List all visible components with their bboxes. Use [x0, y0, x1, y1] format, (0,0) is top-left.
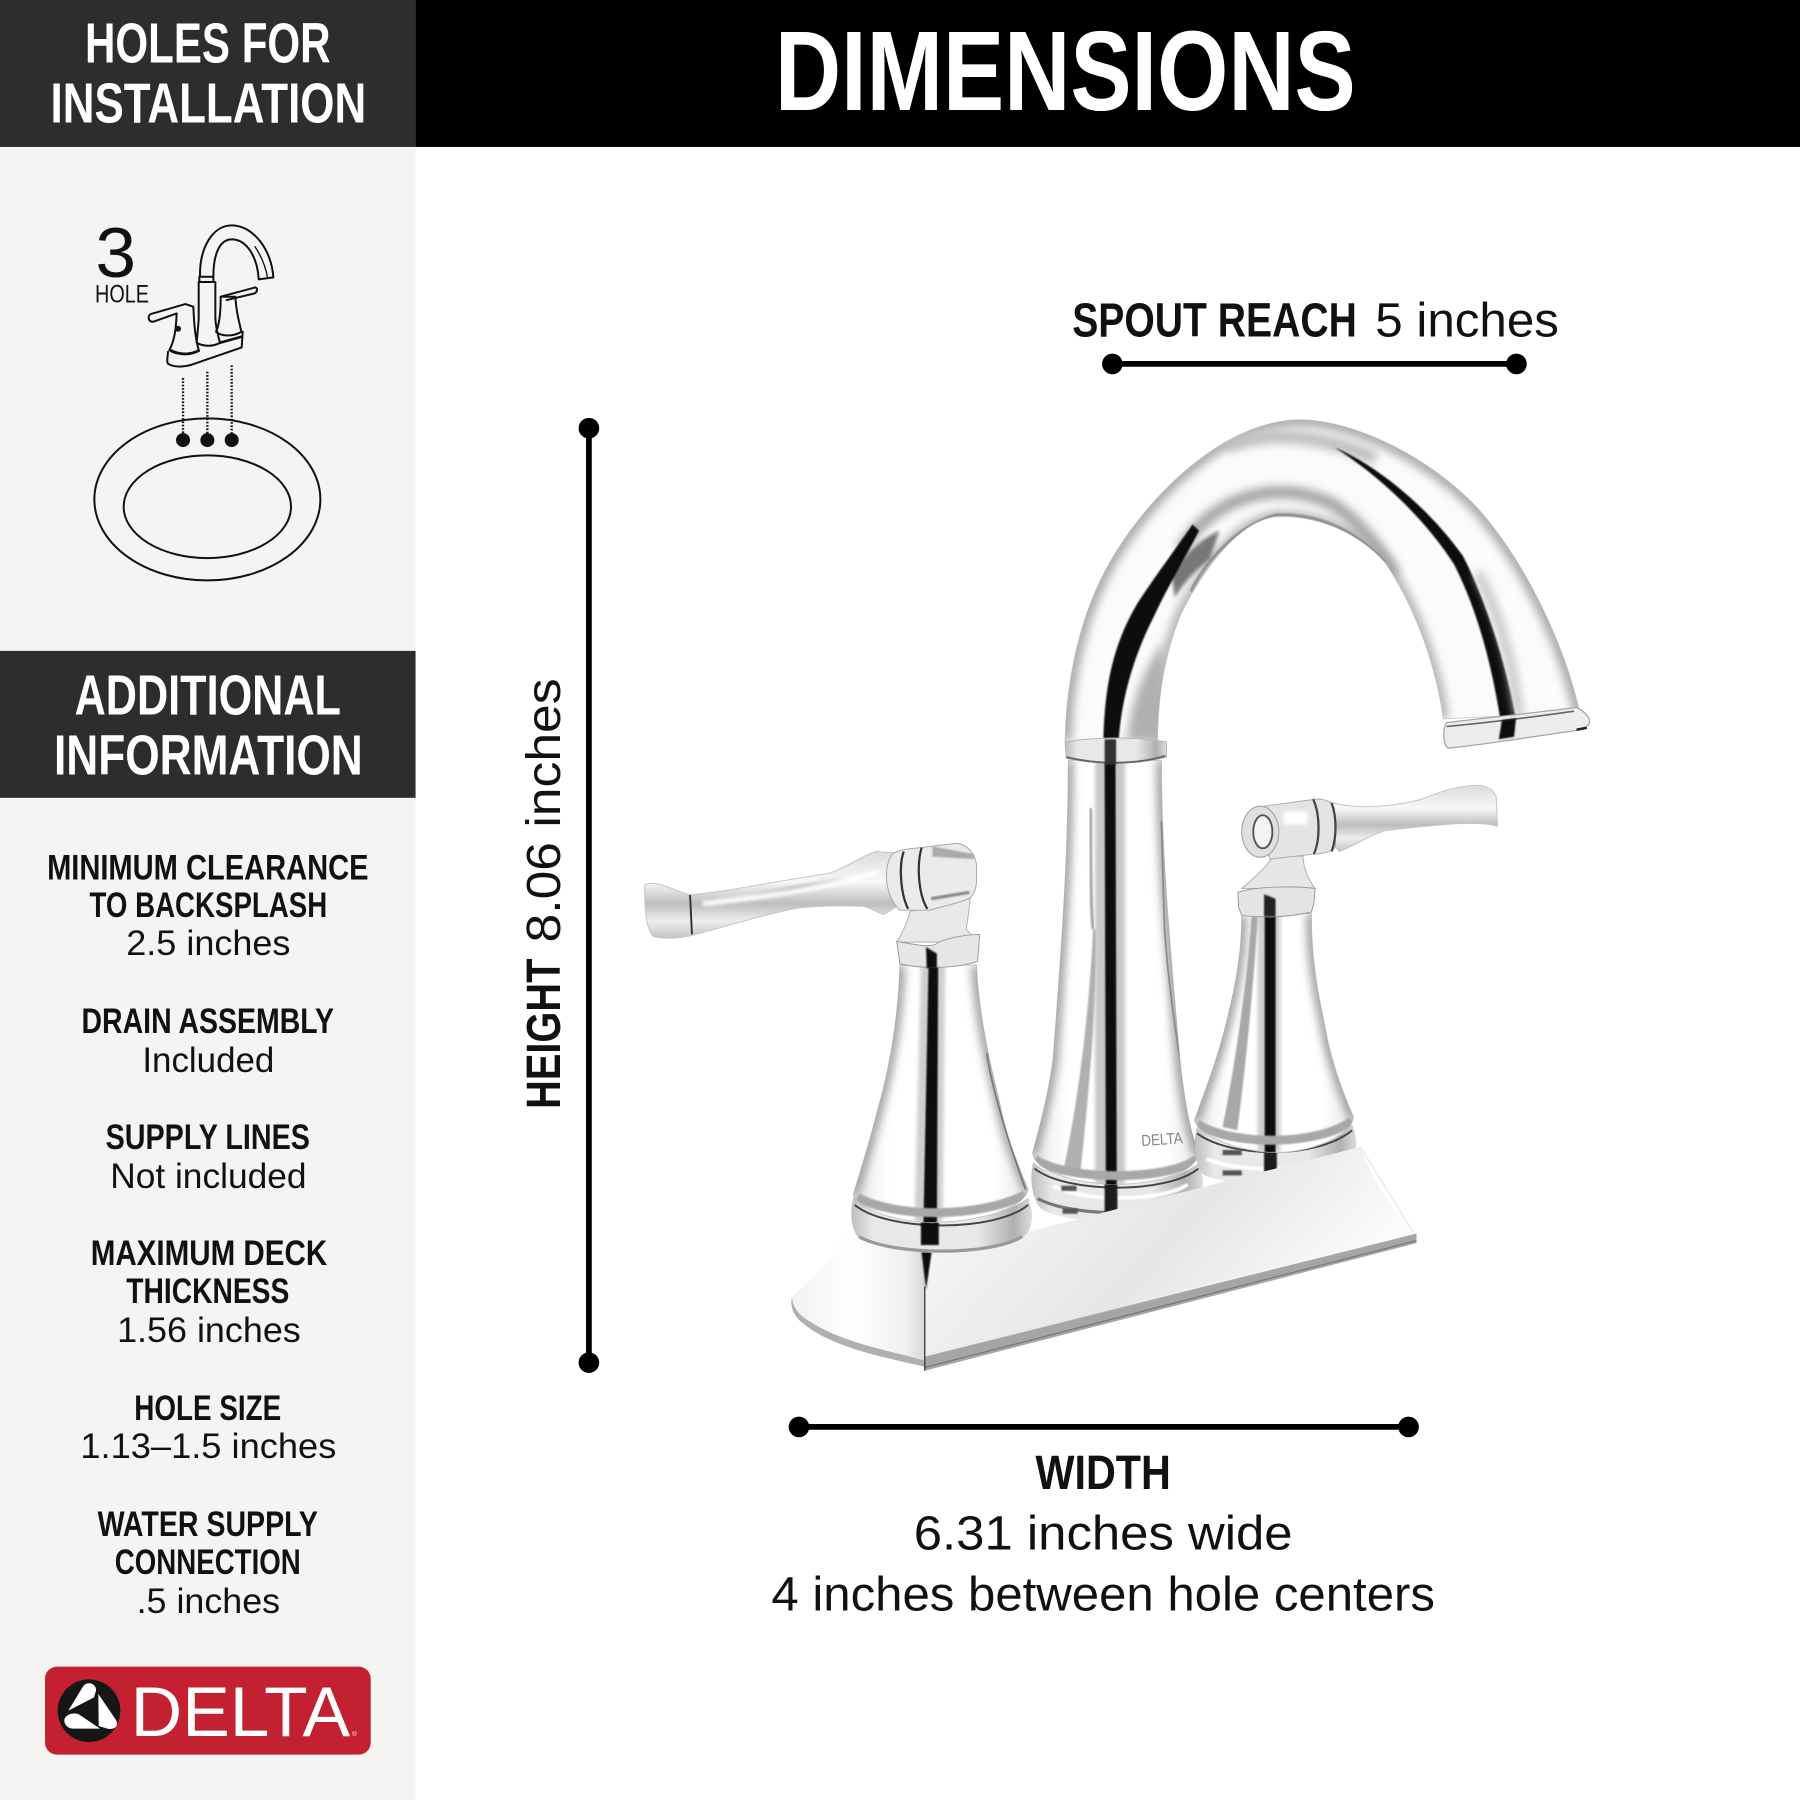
info: maximum deck thickness: MAXIMUM DECK	[91, 1233, 327, 1273]
info: supply lines	[106, 1117, 310, 1196]
info: water supply connection: .5 inches	[137, 1581, 280, 1621]
dimension: width: WIDTH	[1035, 1446, 1171, 1500]
info: minimum clearance: TO BACKSPLASH	[90, 885, 327, 925]
heading: dimensions: DIMENSIONS	[775, 8, 1356, 135]
info: maximum deck thickness: 1.56 inches	[117, 1310, 301, 1350]
logo: delta: DELTA	[131, 1672, 350, 1751]
faucet base plate	[791, 1147, 1417, 1371]
icon: three holes	[176, 433, 239, 447]
dimension: width: 6.31 inches wide	[914, 1507, 1293, 1561]
logo: delta: ®	[352, 1730, 357, 1738]
left base rings	[851, 1197, 1032, 1253]
heading: holes for installation	[0, 0, 416, 147]
spout nozzle	[1444, 707, 1590, 748]
label: 3 hole: 3	[95, 213, 136, 292]
info: drain assembly: DRAIN ASSEMBLY	[82, 1001, 334, 1041]
right barrel	[1260, 799, 1336, 859]
info: drain assembly: Included	[142, 1040, 274, 1080]
label: 3 hole: HOLE	[95, 281, 149, 308]
dimension: width	[771, 1417, 1435, 1622]
left handle	[645, 843, 1032, 1253]
column ring	[1065, 738, 1166, 763]
dimension: height	[517, 418, 599, 1373]
diagram: 3-hole faucet above sink	[94, 213, 320, 580]
dimension: spout reach: 5 inches	[1375, 293, 1559, 347]
dimension: height: HEIGHT	[517, 959, 571, 1109]
heading: additional information	[0, 651, 416, 798]
info: minimum clearance: MINIMUM CLEARANCE	[47, 847, 368, 887]
left lever	[645, 852, 897, 938]
icon: sink outline	[94, 418, 320, 580]
info: drain assembly	[82, 1001, 334, 1080]
right collar and neck	[1238, 856, 1315, 917]
logo: delta	[45, 1667, 371, 1755]
left hub	[887, 843, 976, 910]
info: minimum clearance: 2.5 inches	[126, 923, 290, 963]
icon: dotted guide lines	[183, 365, 232, 433]
left collar and neck	[897, 899, 980, 968]
faucet spout	[1065, 420, 1590, 748]
right handle	[1195, 785, 1498, 1191]
info: maximum deck thickness	[91, 1233, 327, 1350]
heading: dimensions	[416, 0, 1800, 147]
product: chrome faucet	[645, 420, 1590, 1371]
dimension: spout reach: SPOUT REACH	[1072, 293, 1357, 347]
label: 3 hole	[95, 213, 149, 308]
info: water supply connection: CONNECTION	[115, 1542, 301, 1582]
column base rings	[1031, 1162, 1203, 1232]
dimension: width: 4 inches between hole centers	[771, 1568, 1435, 1622]
right base rings	[1195, 1124, 1356, 1191]
faucet column	[1031, 738, 1203, 1232]
dimension: spout reach	[1072, 293, 1559, 374]
heading: additional information: ADDITIONAL	[75, 664, 341, 727]
info: supply lines: SUPPLY LINES	[106, 1117, 310, 1157]
left sidebar background	[0, 0, 416, 1800]
heading: holes for installation: HOLES FOR	[85, 12, 331, 75]
info: minimum clearance	[47, 847, 368, 963]
info: hole size	[80, 1388, 336, 1466]
icon: faucet line drawing	[149, 225, 273, 367]
info: hole size: HOLE SIZE	[134, 1388, 281, 1428]
info: hole size: 1.13–1.5 inches	[80, 1426, 336, 1466]
heading: holes for installation: INSTALLATION	[51, 71, 366, 134]
info: water supply connection: WATER SUPPLY	[98, 1504, 318, 1544]
info: maximum deck thickness: THICKNESS	[126, 1271, 289, 1311]
dimension: height: 8.06 inches	[517, 678, 571, 942]
heading: additional information: INFORMATION	[54, 723, 363, 786]
right lever	[1328, 785, 1498, 852]
faucet column: DELTA	[1141, 1130, 1184, 1150]
info: supply lines: Not included	[110, 1156, 307, 1196]
info: water supply connection	[98, 1504, 318, 1621]
